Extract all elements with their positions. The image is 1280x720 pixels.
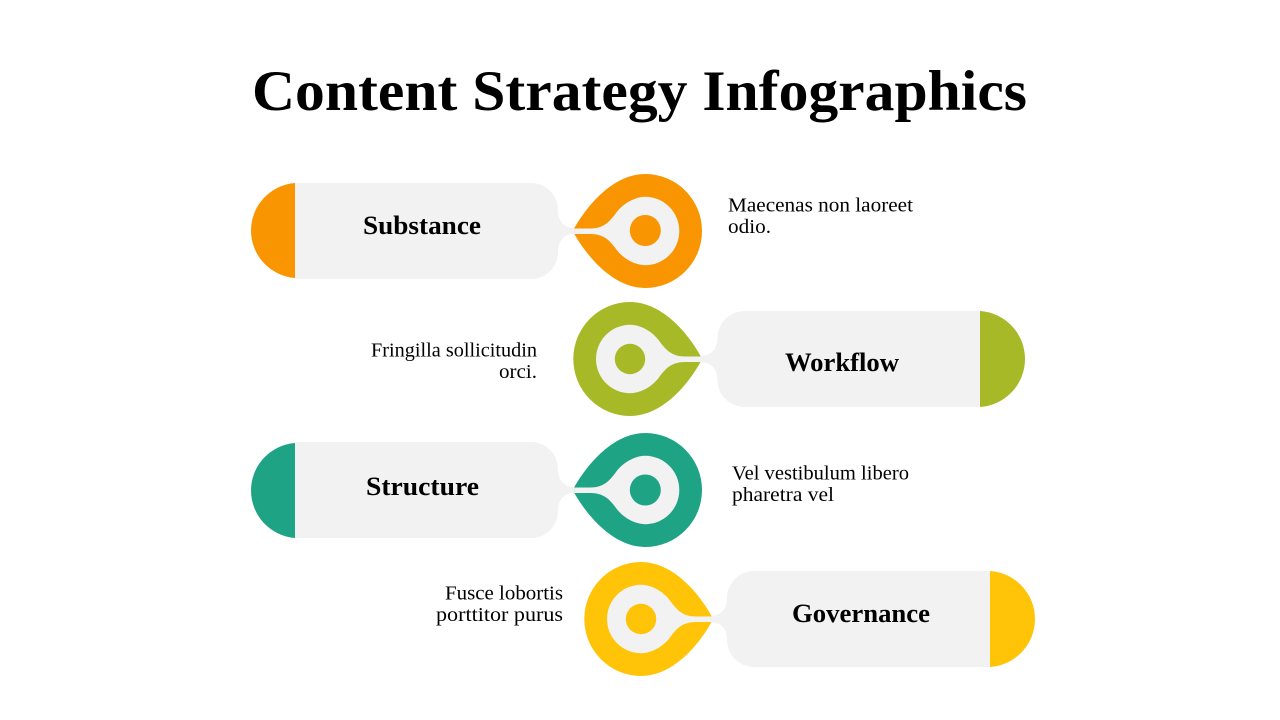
icon: teal drop <box>574 433 702 547</box>
text: substance description <box>728 194 913 238</box>
icon: green drop <box>573 302 700 416</box>
cap: teal <box>251 443 295 538</box>
panel: governance <box>436 562 1035 676</box>
text: substance description: odio. <box>728 216 771 238</box>
heading: governance: Governance <box>792 598 930 628</box>
text: structure description: Vel vestibulum libero <box>732 462 909 484</box>
label card: governance <box>710 571 990 667</box>
text: governance description <box>436 582 563 626</box>
text: structure description <box>732 462 909 506</box>
text: structure description: pharetra vel <box>732 484 834 506</box>
text: workflow description: orci. <box>499 361 537 383</box>
label card: workflow <box>700 311 980 407</box>
cap: yellow <box>990 571 1035 667</box>
text: governance description: Fusce lobortis <box>445 582 563 604</box>
heading: structure: Structure <box>366 471 479 501</box>
text: workflow description <box>371 340 537 383</box>
heading: substance: Substance <box>363 210 481 240</box>
icon: yellow drop <box>584 562 712 676</box>
text: substance description: Maecenas non laoreet <box>728 194 913 216</box>
panel: workflow <box>371 302 1025 416</box>
icon: orange drop <box>574 174 702 288</box>
panel: substance <box>251 174 913 288</box>
cap: green <box>980 311 1025 407</box>
label card: structure <box>295 442 574 538</box>
heading: workflow: Workflow <box>785 347 899 377</box>
text: workflow description: Fringilla sollicitudin <box>371 340 537 362</box>
label card: substance <box>295 183 574 279</box>
panel: structure <box>251 433 909 547</box>
title: Content Strategy Infographics <box>252 60 1027 123</box>
text: governance description: porttitor purus <box>436 604 563 626</box>
cap: orange <box>251 183 295 278</box>
